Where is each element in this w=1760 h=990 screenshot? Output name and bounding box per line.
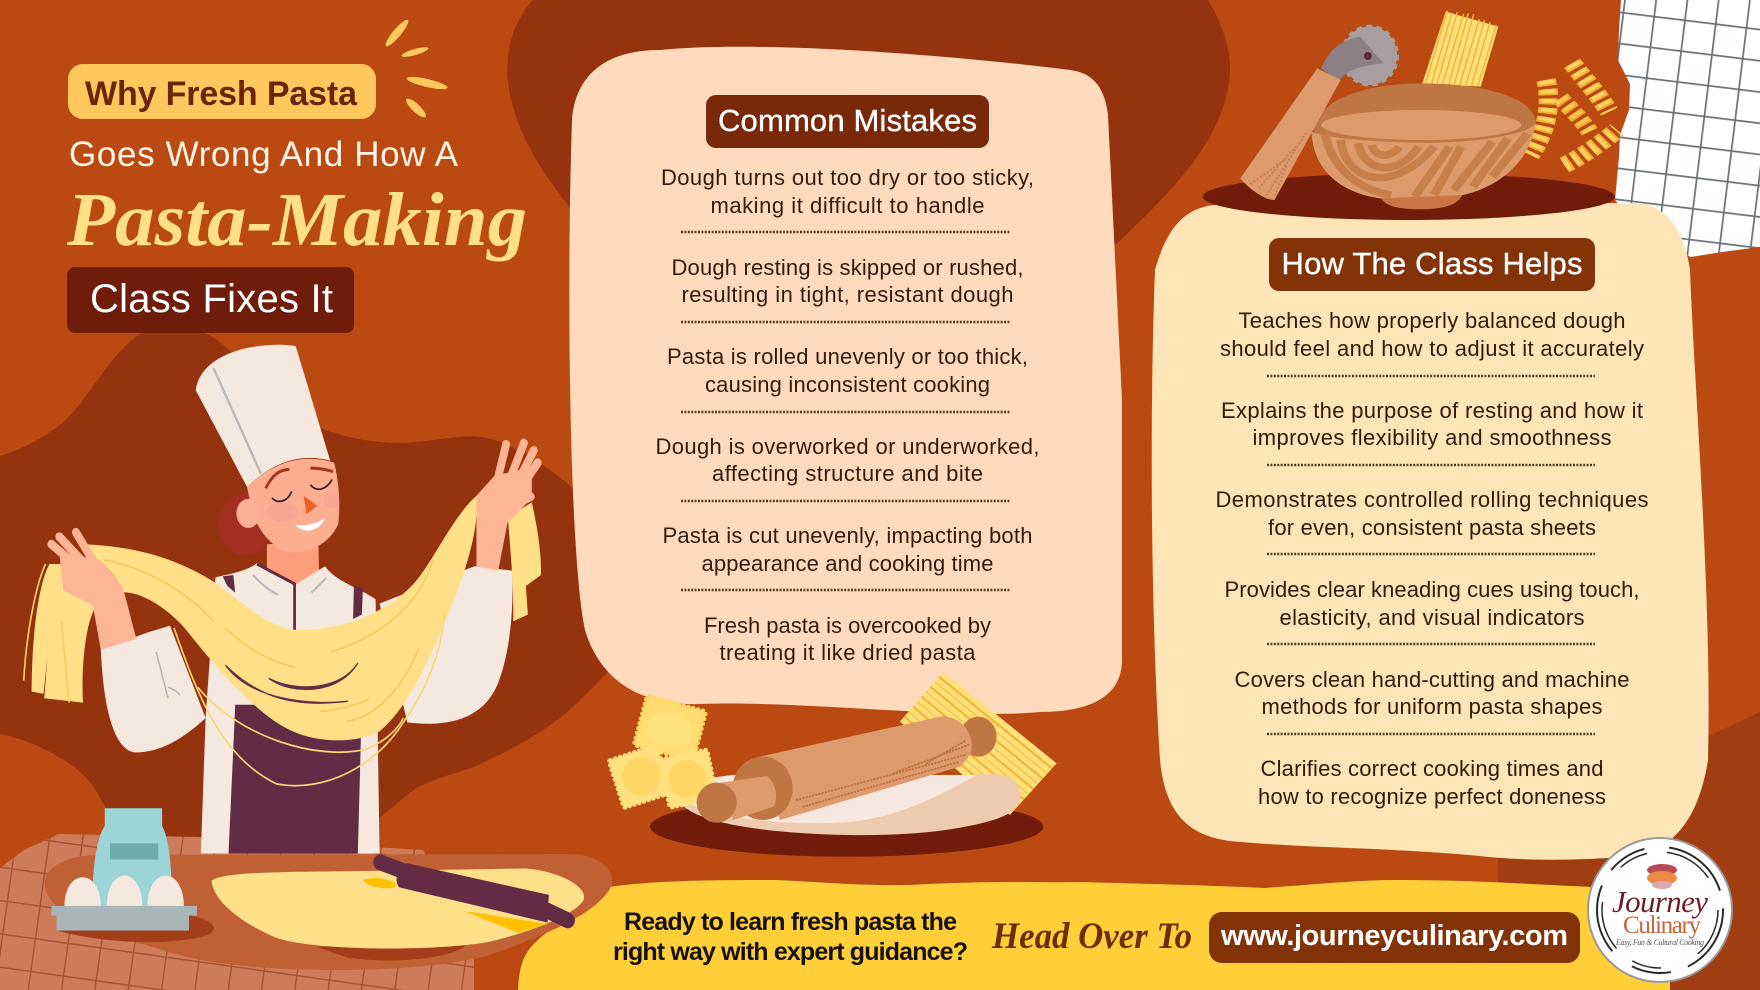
help 4: Provides clear kneading cues using touch, [1224,577,1640,602]
mistake 3 [667,344,1028,412]
question text: right way with expert guidance? [613,938,968,966]
heading: how the class helps: How The Class Helps [1282,246,1582,281]
ravioli [608,696,717,808]
help 4: elasticity, and visual indicators [1280,605,1584,630]
fusilli pasta [1531,63,1617,165]
help 6 [1258,756,1606,809]
mistake 5: appearance and cooking time [702,551,994,576]
butter smear [363,878,548,933]
title block [66,17,527,333]
mistake 1 [661,165,1034,232]
heading: how the class helps [1269,238,1595,291]
help 2: Explains the purpose of resting and how it [1221,398,1643,423]
shadow ellipse [650,797,1043,857]
illustration: rolling pin, ravioli and spaghetti [608,672,1057,857]
title: why fresh pasta pill: Why Fresh Pasta [85,75,358,113]
pasta cutter handle [1240,68,1341,200]
mistake 1: Dough turns out too dry or too sticky, [661,165,1034,190]
yellow footer band [518,880,1670,990]
mistake 5: Pasta is cut unevenly, impacting both [662,523,1032,548]
logo wordmark second line: Culinary [1623,912,1702,939]
logo bowl icon [1647,864,1677,889]
help 3: for even, consistent pasta sheets [1268,515,1596,540]
mistake 5 [662,523,1032,590]
icon: tray shadow [57,915,214,942]
mistake 2: Dough resting is skipped or rushed, [672,255,1024,280]
head over to script: Head Over To [991,916,1192,957]
illustration: bowl, pasta cutter, spaghetti and fusilli [1203,11,1617,220]
handle speckle [1249,133,1306,197]
wooden bowl [1311,83,1536,209]
chef jacket and apron [101,542,513,854]
help 1: Teaches how properly balanced dough [1238,308,1626,333]
mistake 1: making it difficult to handle [710,193,984,218]
help 6: Clarifies correct cooking times and [1260,756,1604,781]
background blob: top centre [507,0,1230,260]
logo badge [1588,838,1732,982]
arms and hands [51,443,538,650]
background blob: behind chef [0,328,620,870]
help 1 [1220,308,1644,376]
footer call to action [613,908,1580,966]
pasta cutter wheel [1321,26,1397,85]
panel: how the class helps [1152,203,1709,860]
dough shadow [316,945,467,960]
spaghetti bundle [1422,11,1498,87]
icon: eggs on tray [51,876,197,931]
help 6: how to recognize perfect doneness [1258,784,1606,809]
icon: flour bag [92,808,172,907]
panel: common mistakes [569,47,1122,714]
decorative sparks [383,17,448,120]
question text: Ready to learn fresh pasta the [624,908,957,936]
question text [613,908,968,966]
wooden board [45,854,612,970]
mistake 3: Pasta is rolled unevenly or too thick, [667,344,1028,369]
mistake 4 [656,434,1040,501]
title: goes wrong line: Goes Wrong And How A [69,135,459,174]
help 5: methods for uniform pasta shapes [1262,694,1602,719]
logo tagline: Easy, Fun & Cultural Cooking [1615,938,1704,947]
mistake 6 [704,613,991,665]
mistake 4: affecting structure and bite [712,461,983,486]
mistake 4: Dough is overworked or underworked, [656,434,1040,459]
mistake 6: Fresh pasta is overcooked by [704,613,991,638]
rolled dough sheet [212,868,584,949]
spaghetti sheet [900,672,1057,815]
website chip: www.journeyculinary.com [1220,920,1568,952]
grid paper: top right [1615,0,1760,257]
icon: rolling pin, purple [380,862,568,923]
illustration: chef stretching pasta [24,345,584,960]
help 3 [1216,487,1648,554]
help 5 [1234,667,1630,734]
rolling pin [697,717,997,823]
title: class fixes it chip: Class Fixes It [90,277,333,321]
mistake 3: causing inconsistent cooking [705,372,990,397]
heading: common mistakes [706,95,989,148]
help 2: improves flexibility and smoothness [1252,425,1612,450]
fresh pasta strands [24,491,541,786]
help 4 [1224,577,1640,644]
mistake 6: treating it like dried pasta [720,640,976,665]
help 1: should feel and how to adjust it accurately [1220,336,1644,361]
checked cloth [0,834,474,990]
logo wordmark: Journey [1612,884,1708,919]
mistake 2 [672,255,1024,322]
mistake 2: resulting in tight, resistant dough [682,282,1014,307]
help 2 [1221,398,1643,465]
heading: common mistakes: Common Mistakes [718,103,977,138]
shadow ellipse [1203,173,1615,220]
title: pasta-making script: Pasta-Making [66,178,527,262]
background shape: lower right [1498,712,1760,990]
title: why fresh pasta pill [68,64,376,119]
help 5: Covers clean hand-cutting and machine [1234,667,1630,692]
flour cloth [677,774,1020,835]
chef head and hat [196,345,339,555]
title: class fixes it chip [67,267,354,333]
website chip [1209,912,1580,963]
help 3: Demonstrates controlled rolling techniques [1216,487,1648,512]
